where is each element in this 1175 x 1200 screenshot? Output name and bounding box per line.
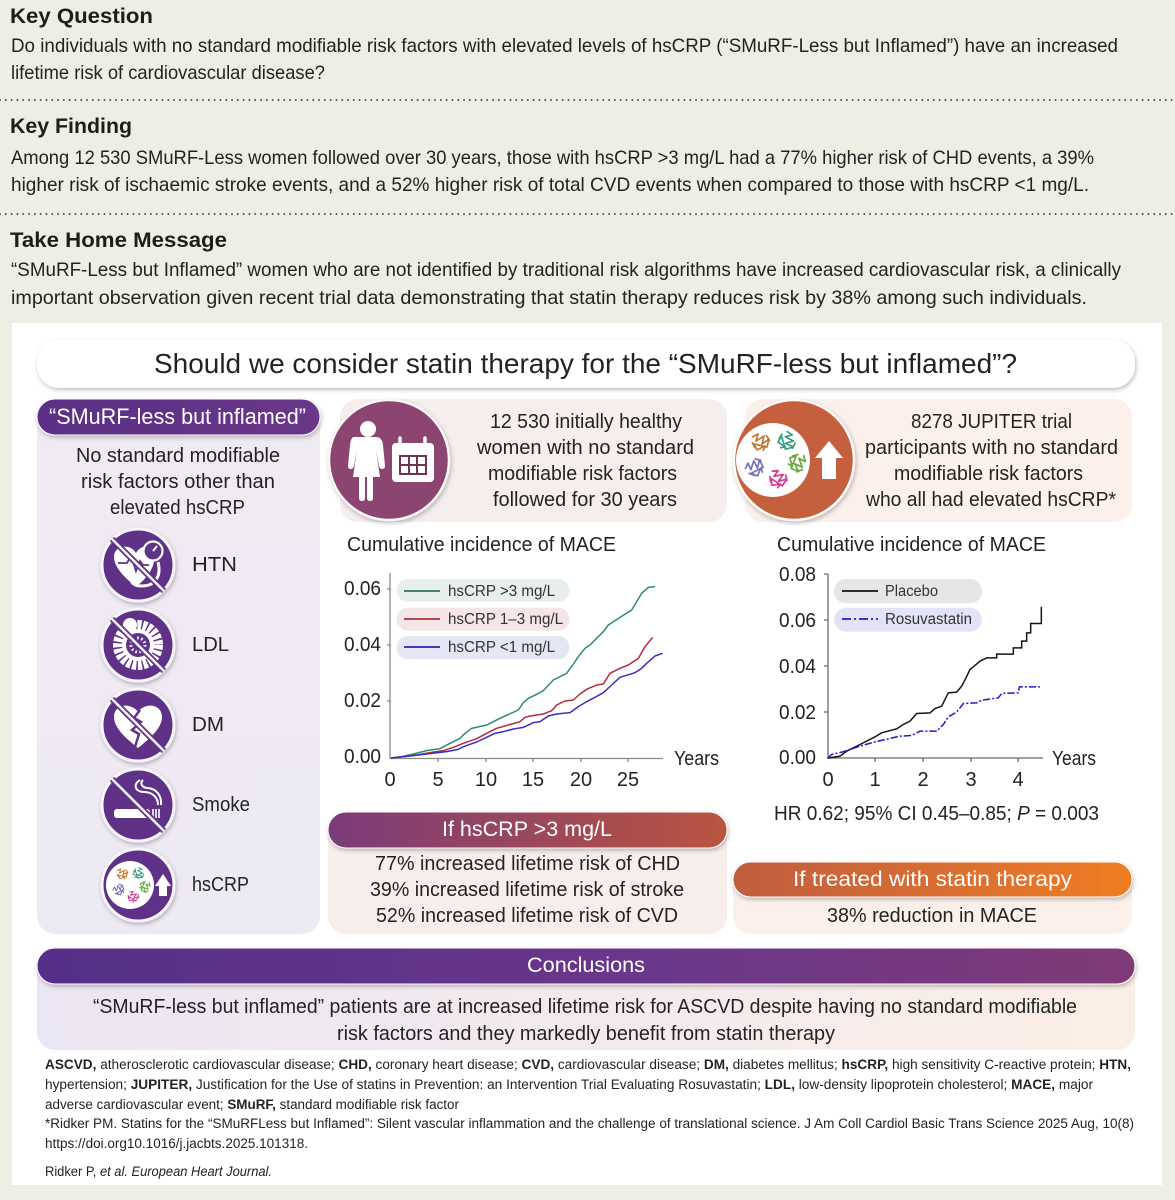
panel: women cohort header (329, 399, 727, 522)
cohort description (476, 411, 694, 511)
chart title: Cumulative incidence of MACE (777, 534, 1046, 556)
panel heading (733, 862, 1132, 897)
panel: if hsCRP above 3 (328, 812, 727, 934)
title pill (37, 340, 1135, 388)
footnotes: ASCVD, atherosclerotic cardiovascular disease; CHD, coronary heart disease; CVD, cardiovascular disease; DM, diabetes mellitus; hsCRP, high sensitivity C-reactive protein; HTN, (45, 1057, 1131, 1072)
text block: take home message (10, 229, 1121, 309)
x-axis labels: 0 (822, 769, 834, 791)
y-axis labels (344, 578, 381, 768)
panel: JUPITER header (734, 399, 1132, 522)
conclusion text: risk factors and they markedly benefit from statin therapy (337, 1023, 835, 1045)
x-axis labels: 5 (432, 769, 444, 791)
x-axis labels (822, 769, 1024, 791)
icon: LDL (102, 609, 174, 681)
result: 38% reduction in MACE (827, 905, 1037, 927)
x-axis labels: 4 (1012, 769, 1024, 791)
label: Smoke: Smoke (192, 794, 250, 816)
risk list: 52% increased lifetime risk of CVD (376, 905, 678, 927)
conclusion text: “SMuRF-less but inflamed” patients are at increased lifetime risk for ASCVD despite having no standard modifiable (93, 996, 1077, 1018)
footnotes: https://doi.org10.1016/j.jacbts.2025.101318. (45, 1136, 308, 1151)
y-axis labels: 0.04 (344, 634, 381, 656)
x-axis title: Years (1052, 748, 1096, 770)
x-axis labels: 3 (965, 769, 977, 791)
x-axis labels: 25 (617, 769, 639, 791)
cohort description: women with no standard (476, 437, 694, 459)
panel description: elevated hsCRP (110, 497, 245, 519)
risk list: 77% increased lifetime risk of CHD (375, 853, 680, 875)
y-axis labels: 0.08 (779, 564, 816, 586)
y-axis labels: 0.06 (779, 610, 816, 632)
panel description (76, 445, 280, 519)
icon: hsCRP (102, 849, 174, 921)
panel heading (328, 812, 727, 848)
line chart: JUPITER cumulative incidence (774, 534, 1099, 825)
axes (387, 573, 663, 762)
cohort description: modifiable risk factors (488, 463, 677, 485)
y-axis labels: 0.02 (779, 702, 816, 724)
icon: diabetes broken heart (102, 689, 174, 761)
footnotes: *Ridker PM. Statins for the “SMuRFLess but Inflamed”: Silent vascular inflammation and the challenge of translational science. J Am Coll Cardiol Basic Trans Science 2025 Aug, 10(8) (45, 1116, 1134, 1131)
label: LDL: LDL (192, 634, 229, 656)
panel heading: Conclusions (527, 954, 645, 977)
text block: take home message: “SMuRF-Less but Inflamed” women who are not identified by traditional risk algorithms have increased cardiovascular risk, a clinically (11, 259, 1121, 281)
panel description: risk factors other than (81, 471, 275, 493)
hazard ratio: HR 0.62; 95% CI 0.45–0.85; P = 0.003 (774, 803, 1099, 825)
panel heading (37, 399, 320, 435)
x-axis title: Years (674, 748, 719, 770)
icon: hypertension (102, 529, 174, 601)
label: HTN: HTN (192, 554, 237, 576)
footnotes (45, 1057, 1134, 1179)
line chart: women cumulative incidence (344, 534, 719, 791)
panel heading (37, 948, 1135, 984)
label: hsCRP: hsCRP (192, 874, 249, 896)
x-axis labels: 20 (570, 769, 592, 791)
text block: key finding: Key Finding (10, 115, 132, 138)
footnotes: hypertension; JUPITER, Justification for the Use of statins in Prevention: an Intervention Trial Evaluating Rosuvastatin; LDL, low-density lipoprotein cholesterol; MACE, major (45, 1077, 1094, 1092)
JUPITER description: participants with no standard (865, 437, 1118, 459)
x-axis labels: 1 (869, 769, 881, 791)
text block: key question (10, 5, 1118, 84)
legend: hsCRP >3 mg/L (448, 583, 555, 600)
JUPITER description: 8278 JUPITER trial (911, 411, 1072, 433)
text block: key finding (10, 115, 1094, 196)
y-axis labels: 0.00 (344, 746, 381, 768)
legend: Placebo (885, 583, 938, 600)
panel: white graphical abstract (12, 323, 1162, 1185)
panel heading: If hsCRP >3 mg/L (442, 818, 612, 841)
text block: key question: Key Question (10, 5, 153, 28)
icon: smoking (102, 769, 174, 841)
x-axis labels: 0 (384, 769, 396, 791)
legend: hsCRP 1–3 mg/L (448, 611, 563, 628)
icon: proteins with up arrow (734, 400, 854, 520)
legend (397, 579, 569, 659)
cohort description: followed for 30 years (493, 489, 677, 511)
y-axis labels (779, 564, 816, 769)
cohort description: 12 530 initially healthy (490, 411, 682, 433)
panel: conclusions (37, 948, 1135, 1050)
title pill: Should we consider statin therapy for the “SMuRF-less but inflamed”? (154, 348, 1017, 379)
y-axis labels: 0.04 (779, 656, 816, 678)
footnotes: adverse cardiovascular event; SMuRF, standard modifiable risk factor (45, 1097, 459, 1112)
text block: key finding: Among 12 530 SMuRF-Less women followed over 30 years, those with hsCRP >3 mg/L had a 77% higher risk of CHD events, a 39% (11, 147, 1094, 169)
panel heading: “SMuRF-less but inflamed” (49, 404, 306, 429)
risk list: 39% increased lifetime risk of stroke (370, 879, 684, 901)
JUPITER description (865, 411, 1118, 511)
y-axis labels: 0.06 (344, 578, 381, 600)
text block: take home message: Take Home Message (10, 229, 227, 252)
label: DM: DM (192, 714, 224, 736)
panel: if treated with statin (733, 862, 1132, 934)
text block: take home message: important observation given recent trial data demonstrating that statin therapy reduces risk by 38% among such individuals. (11, 287, 1087, 309)
JUPITER description: modifiable risk factors (894, 463, 1083, 485)
y-axis labels: 0.00 (779, 747, 816, 769)
panel description: No standard modifiable (76, 445, 280, 467)
panel heading: If treated with statin therapy (793, 868, 1073, 891)
conclusion text (93, 996, 1077, 1045)
curves (828, 607, 1041, 758)
footnotes: Ridker P, et al. European Heart Journal. (45, 1164, 272, 1179)
chart title: Cumulative incidence of MACE (347, 534, 616, 556)
text block: key question: lifetime risk of cardiovascular disease? (11, 62, 325, 84)
legend: Rosuvastatin (885, 611, 972, 628)
text block: key question: Do individuals with no standard modifiable risk factors with elevated levels of hsCRP (“SMuRF-Less but Inflamed”) have an increased (11, 35, 1118, 57)
legend (834, 579, 982, 632)
icon: woman and calendar (329, 400, 449, 520)
JUPITER description: who all had elevated hsCRP* (865, 489, 1116, 511)
axes (824, 574, 1043, 762)
y-axis labels: 0.02 (344, 690, 381, 712)
curves (391, 587, 663, 758)
legend: hsCRP <1 mg/L (448, 639, 555, 656)
text block: key finding: higher risk of ischaemic stroke events, and a 52% higher risk of total CVD events when compared to those with hsCRP <1 mg/L. (11, 174, 1089, 196)
x-axis labels (384, 769, 639, 791)
x-axis labels: 2 (917, 769, 929, 791)
risk list (370, 853, 684, 927)
x-axis labels: 10 (475, 769, 497, 791)
x-axis labels: 15 (522, 769, 544, 791)
panel: SMuRF-less but inflamed (37, 399, 320, 934)
